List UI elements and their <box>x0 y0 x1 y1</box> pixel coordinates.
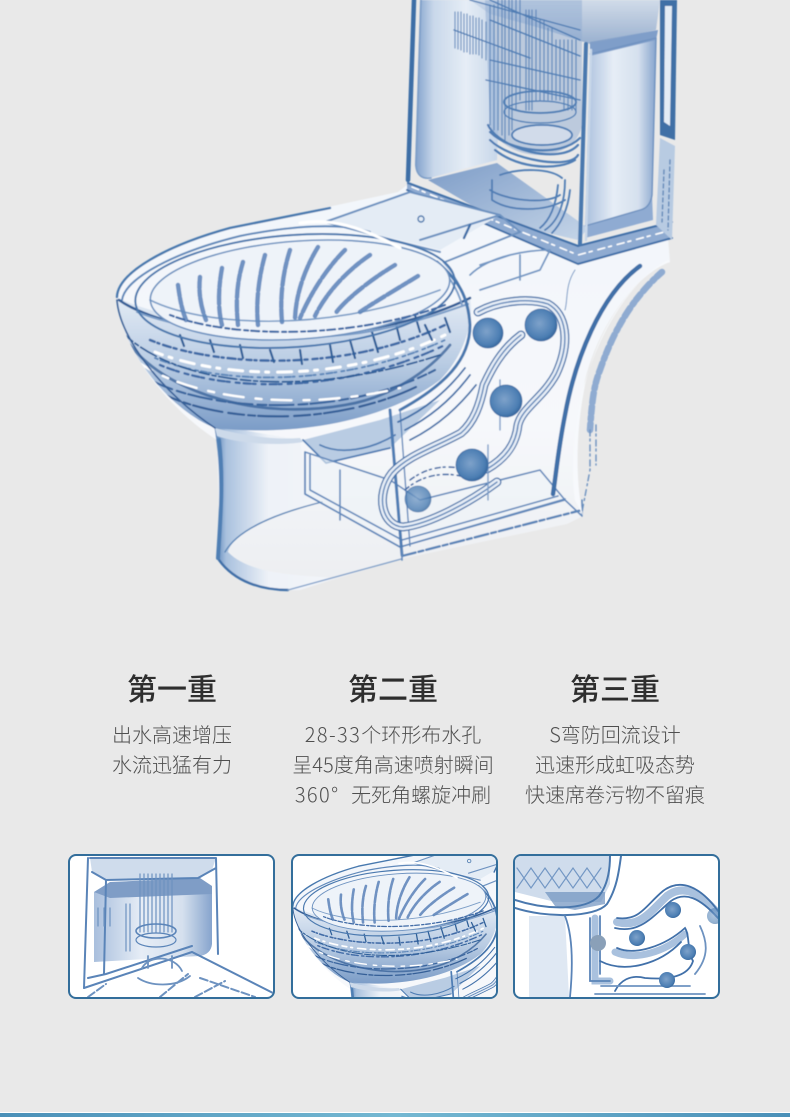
bowl lower turbulence <box>117 297 471 430</box>
tank right side strip <box>656 0 677 240</box>
description: first stage: 水流迅猛有力 <box>112 749 232 778</box>
column: first stage <box>112 665 232 778</box>
thumbnail: bowl detail <box>291 854 498 999</box>
footer colour bar <box>0 1112 790 1117</box>
tank lid band <box>470 0 660 44</box>
illustration: transparent toilet cutaway <box>115 0 678 592</box>
description: second stage: 28-33个环形布水孔 <box>305 719 481 748</box>
thumbnail: S-trap detail <box>513 854 720 999</box>
toilet body silhouette <box>117 185 670 590</box>
bowl opening with ribs <box>131 224 459 358</box>
water balls <box>405 309 557 512</box>
white rim highlight <box>300 222 400 248</box>
tank channel under deck <box>443 250 575 320</box>
description: second stage: 360° 无死角螺旋冲刷 <box>295 779 491 808</box>
description: third stage: S弯防回流设计 <box>549 719 681 748</box>
base box <box>305 410 582 560</box>
mechanism shading <box>485 0 582 155</box>
pedestal foot <box>214 425 401 590</box>
S-trap pipes <box>382 301 565 527</box>
back curve strip <box>553 260 670 516</box>
tank front corner post <box>580 44 586 244</box>
tank right pane <box>585 30 658 238</box>
under-bowl trapway <box>303 400 440 463</box>
column: second stage <box>292 665 494 808</box>
description: first stage <box>112 719 232 778</box>
tank base edge <box>407 183 672 265</box>
description: second stage: 呈45度角高速喷射瞬间 <box>292 749 494 778</box>
description: second stage <box>292 719 494 808</box>
description: third stage: 快速席卷污物不留痕 <box>525 779 705 808</box>
thumbnail: tank detail <box>68 854 275 999</box>
heading: first stage: 第一重 <box>127 665 217 709</box>
description: third stage: 迅速形成虹吸态势 <box>535 749 695 778</box>
description: first stage: 出水高速增压 <box>112 719 232 748</box>
tank left pane <box>408 0 500 180</box>
bowl rim <box>117 208 470 428</box>
description: third stage <box>525 719 705 808</box>
heading: second stage: 第二重 <box>348 665 438 709</box>
heading: third stage: 第三重 <box>570 665 660 709</box>
flush mechanism <box>454 0 580 233</box>
bowl deck <box>325 192 520 262</box>
column: third stage <box>525 665 705 808</box>
tank floor <box>428 163 585 240</box>
